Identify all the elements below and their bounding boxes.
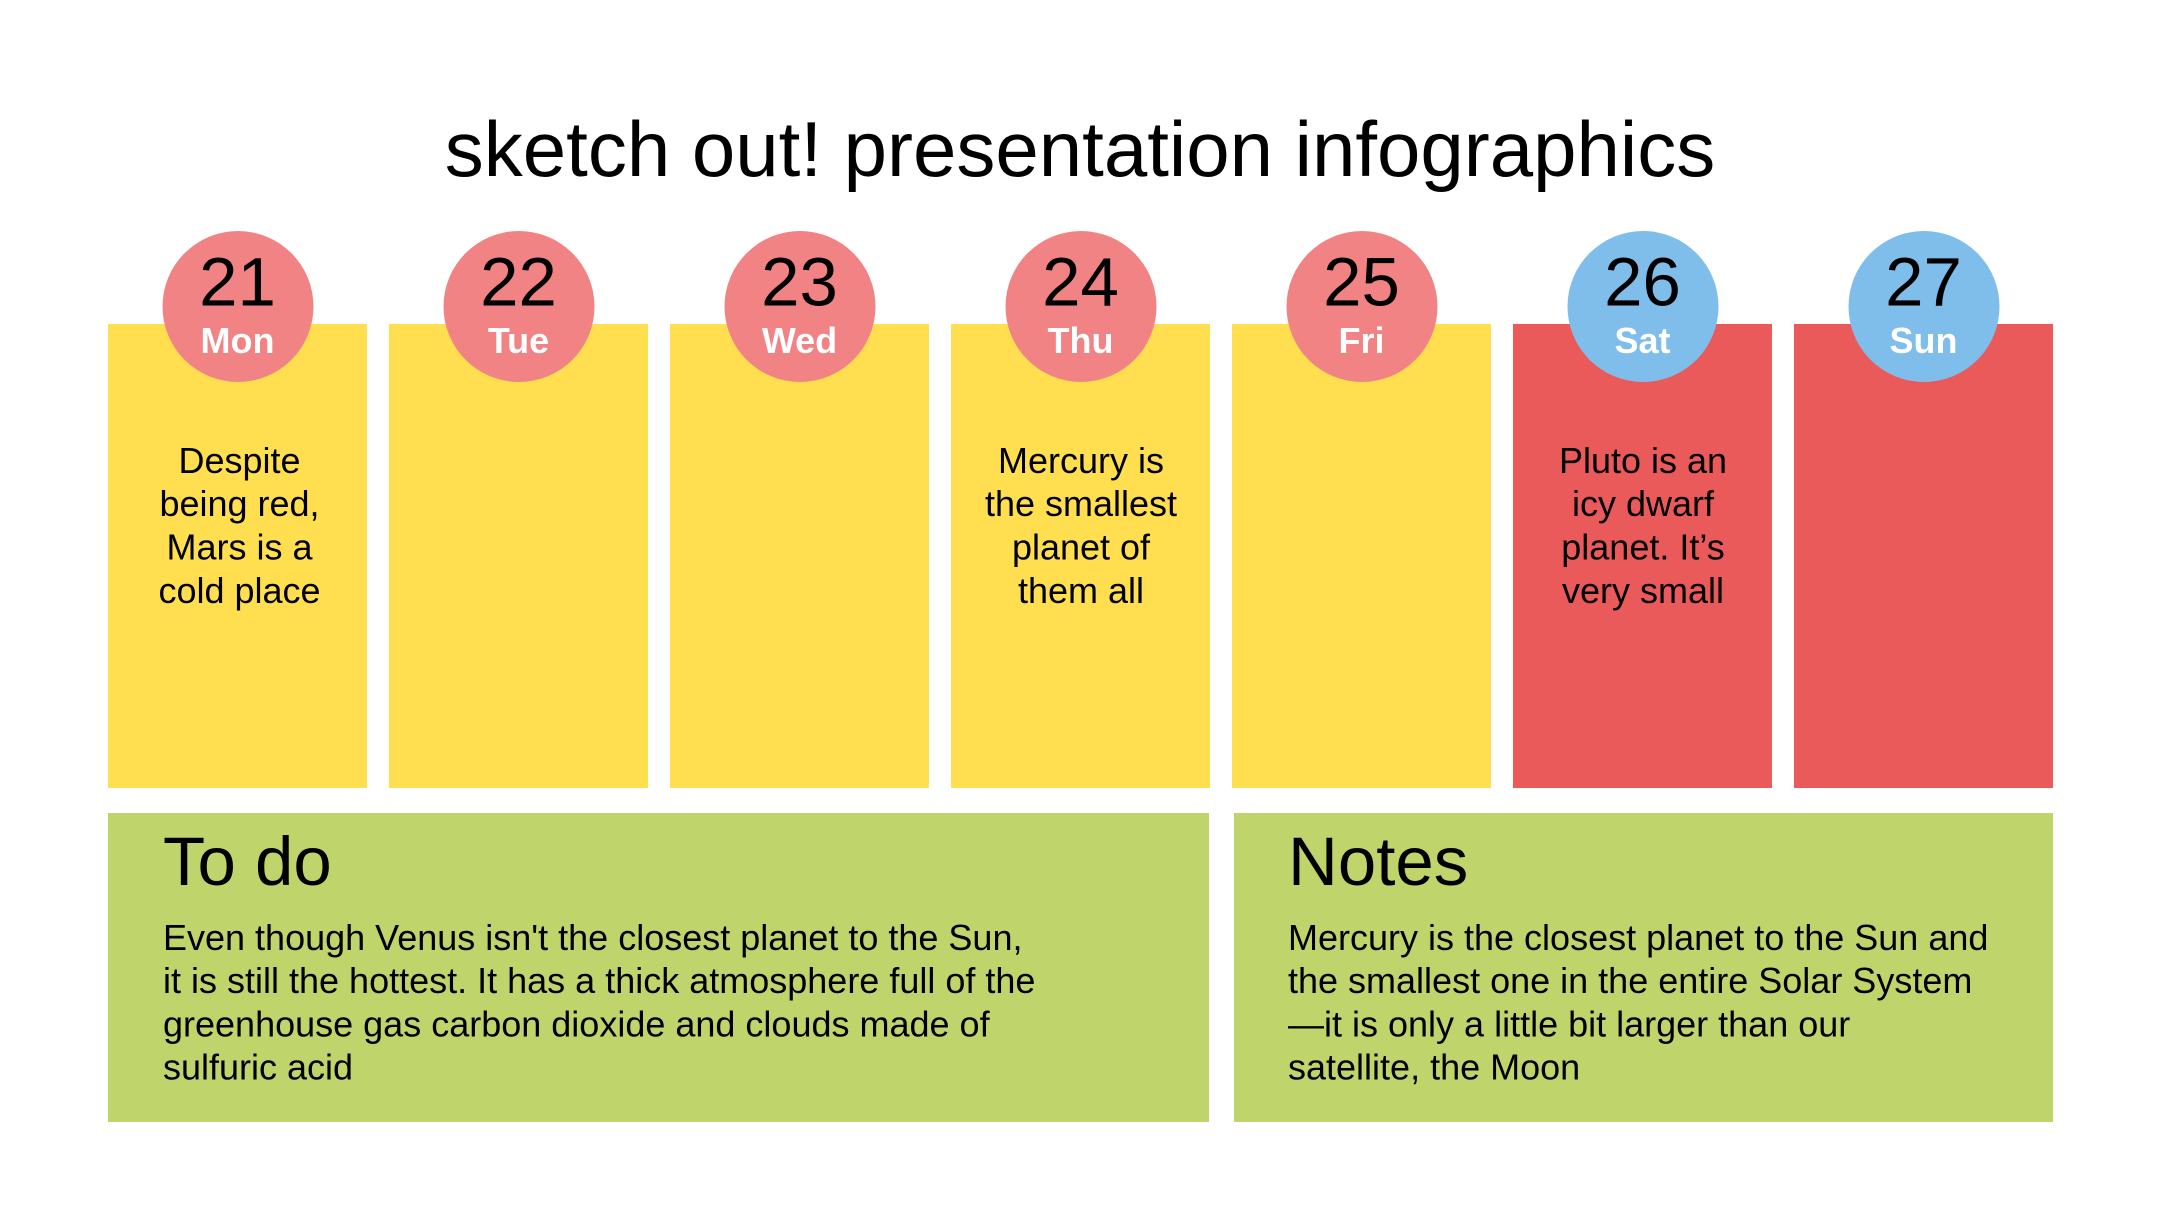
badge: 25 Fri: 25 [1323, 244, 1400, 320]
badge: 21 Mon: Mon [201, 320, 274, 361]
badge: 23 Wed: Wed [762, 320, 837, 361]
panel: day card Thursday [951, 231, 1210, 788]
badge: 22 Tue: Tue [488, 320, 549, 361]
text: notes body: satellite, the Moon [1288, 1046, 1580, 1088]
heading: to do: To do [163, 823, 332, 900]
panel: notes [1234, 813, 2053, 1122]
text: notes body: —it is only a little bit larger than our [1288, 1004, 1850, 1044]
text: to do body: it is still the hottest. It has a thick atmosphere full of the [163, 960, 1035, 1001]
badge: 23 Wed [724, 231, 876, 382]
note: Mercury: them all [1018, 570, 1144, 611]
text: to do body: greenhouse gas carbon dioxide and clouds made of [163, 1004, 991, 1044]
note: Mercury: the smallest [985, 483, 1177, 524]
badge: 22 Tue [444, 231, 594, 382]
note: Mercury: Mercury is [998, 440, 1164, 481]
panel: day card Wednesday [670, 231, 929, 788]
badge: 25 Fri: Fri [1338, 320, 1385, 361]
panel: day card Friday [1232, 231, 1491, 788]
badge: 21 Mon: 21 [199, 244, 276, 320]
text: notes body: the smallest one in the entire Solar System [1288, 960, 1972, 1001]
badge: 27 Sun: 27 [1885, 244, 1962, 320]
panel: to do [108, 813, 1209, 1122]
note: Mercury: planet of [1012, 526, 1151, 568]
panel: day card Sunday [1794, 231, 2053, 788]
note: Pluto: very small [1562, 570, 1724, 611]
badge: 24 Thu [1006, 231, 1156, 382]
note: Mars: cold place [158, 570, 321, 611]
badge: 23 Wed: 23 [761, 244, 838, 320]
text: to do body: Even though Venus isn't the closest planet to the Sun, [163, 917, 1022, 958]
note: Pluto: icy dwarf [1572, 483, 1715, 524]
panel: day card Tuesday [389, 231, 648, 788]
badge: 26 Sat: 26 [1604, 244, 1681, 320]
note: Mars: being red, [159, 483, 320, 524]
badge: 27 Sun [1848, 231, 2000, 382]
badge: 27 Sun: Sun [1890, 320, 1958, 361]
badge: 22 Tue: 22 [480, 244, 557, 320]
title: sketch out! presentation infographics [445, 105, 1715, 193]
badge: 26 Sat [1568, 231, 1718, 382]
note: Pluto: Pluto is an [1559, 440, 1727, 481]
text: to do body: sulfuric acid [163, 1046, 353, 1088]
note: Mars: Mars is a [166, 526, 313, 568]
heading: notes: Notes [1288, 823, 1468, 900]
badge: 26 Sat: Sat [1614, 320, 1671, 361]
badge: 24 Thu: Thu [1048, 320, 1113, 361]
badge: 25 Fri [1286, 231, 1438, 382]
note: Mars: Despite [178, 440, 301, 481]
text: notes body: Mercury is the closest planet to the Sun and [1288, 917, 1988, 958]
badge: 21 Mon [162, 231, 314, 382]
note: Pluto: planet. It’s [1561, 526, 1725, 568]
panel: day card Saturday [1513, 231, 1772, 788]
badge: 24 Thu: 24 [1042, 244, 1119, 320]
panel: day card Monday [108, 231, 367, 788]
